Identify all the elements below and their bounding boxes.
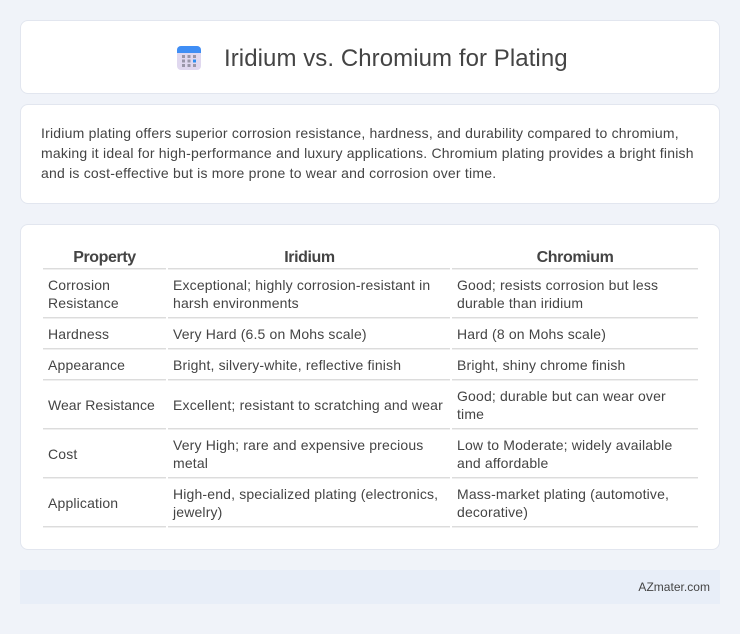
row: corrosion resistance: durable than iridium xyxy=(457,295,583,311)
row: cost: Very High; rare and expensive precious xyxy=(173,437,423,453)
row: cost: Low to Moderate; widely available xyxy=(457,437,672,453)
row: hardness xyxy=(48,326,606,342)
row: cost: Cost xyxy=(48,446,77,462)
footer bar xyxy=(20,570,720,604)
summary text: making it ideal for high-performance and luxury applications. Chromium plating provides a bright finish xyxy=(41,145,694,161)
row: application: decorative) xyxy=(457,504,528,520)
row: wear resistance: Good; durable but can wear over xyxy=(457,388,666,404)
row: cost: metal xyxy=(173,455,208,471)
row: corrosion resistance: Exceptional; highly corrosion-resistant in xyxy=(173,277,430,293)
row: cost xyxy=(48,437,672,471)
row: hardness: Hardness xyxy=(48,326,109,342)
row: wear resistance: time xyxy=(457,406,484,422)
table header: Iridium xyxy=(284,249,335,266)
row: appearance: Bright, shiny chrome finish xyxy=(457,357,626,373)
row: corrosion resistance: Good; resists corrosion but less xyxy=(457,277,658,293)
summary text: and is cost-effective but is more prone to wear and corrosion over time. xyxy=(41,165,496,181)
row: application xyxy=(48,486,669,520)
row: appearance: Appearance xyxy=(48,357,125,373)
panel: summary xyxy=(20,104,720,204)
table header: Property xyxy=(73,249,136,266)
row: cost: and affordable xyxy=(457,455,549,471)
row: wear resistance xyxy=(48,388,666,422)
icon: calendar xyxy=(177,46,201,70)
row: application: jewelry) xyxy=(173,504,223,520)
row: hardness: Hard (8 on Mohs scale) xyxy=(457,326,606,342)
row: application: Mass-market plating (automotive, xyxy=(457,486,669,502)
table header: Chromium xyxy=(537,249,613,266)
row: corrosion resistance: Resistance xyxy=(48,295,119,311)
summary text: Iridium plating offers superior corrosion resistance, hardness, and durability compared to chromium, xyxy=(41,125,679,141)
panel: comparison table xyxy=(20,224,720,550)
footer credit: AZmater.com xyxy=(638,580,710,594)
row: hardness: Very Hard (6.5 on Mohs scale) xyxy=(173,326,367,342)
title card xyxy=(20,20,720,94)
summary text xyxy=(41,125,694,181)
row: corrosion resistance: Corrosion xyxy=(48,277,110,293)
row: application: High-end, specialized plating (electronics, xyxy=(173,486,438,502)
title: Iridium vs. Chromium for Plating xyxy=(224,45,568,72)
row: corrosion resistance: harsh environments xyxy=(173,295,299,311)
row: appearance xyxy=(48,357,626,373)
row: application: Application xyxy=(48,495,118,511)
row: appearance: Bright, silvery-white, reflective finish xyxy=(173,357,401,373)
comparison table xyxy=(43,249,698,528)
row: wear resistance: Wear Resistance xyxy=(48,397,155,413)
table header xyxy=(73,249,613,266)
row: corrosion resistance xyxy=(48,277,658,311)
row: wear resistance: Excellent; resistant to scratching and wear xyxy=(173,397,443,413)
